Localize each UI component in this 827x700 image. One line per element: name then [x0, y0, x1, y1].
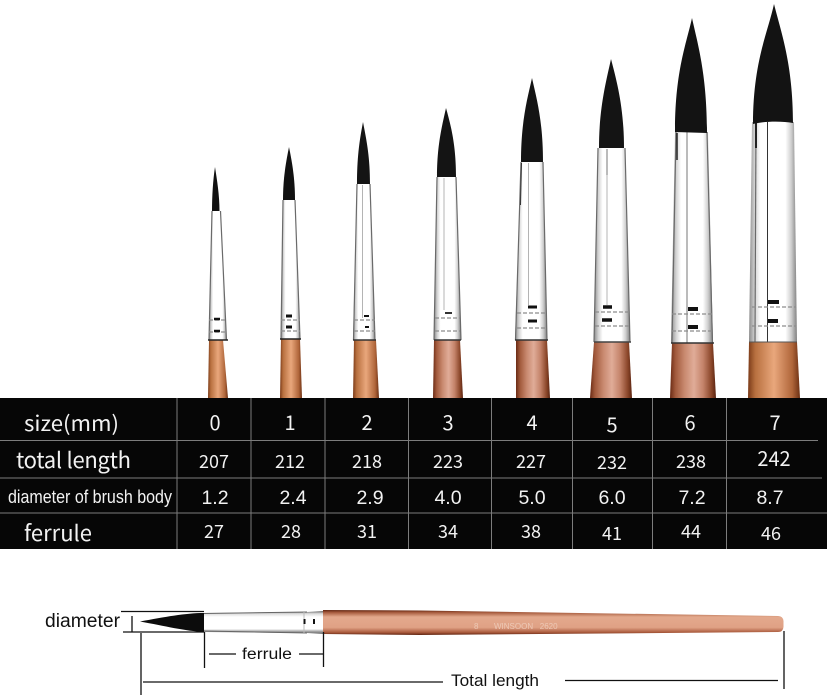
row: ferrule: ferrule [24, 516, 92, 548]
diameter marker [45, 611, 204, 632]
row: diameter of brush body: 8.7 [756, 487, 784, 509]
ferrule marker: ferrule [242, 646, 292, 663]
row: total length: 212 [275, 448, 305, 474]
row: total length: 207 [199, 448, 229, 474]
brush ferrule [204, 611, 323, 634]
total length marker [141, 631, 784, 695]
handle imprint: 8 WINSOON 2620 [474, 622, 558, 631]
row: diameter of brush body: diameter of brush body [8, 487, 172, 507]
total length marker: Total length [451, 672, 539, 690]
row: ferrule: 38 [521, 518, 541, 544]
row: ferrule [24, 516, 781, 548]
row: diameter of brush body: 7.2 [678, 487, 706, 509]
row: total length: 242 [757, 443, 791, 472]
row: ferrule: 46 [761, 520, 781, 546]
brush size 2 [353, 122, 379, 398]
row: size: 4 [526, 407, 538, 436]
row: diameter of brush body: 5.0 [518, 487, 546, 509]
brush size 6 [670, 18, 716, 398]
row: size: 2 [361, 407, 373, 436]
row: diameter of brush body: 1.2 [201, 487, 229, 509]
row: diameter of brush body: 6.0 [598, 487, 626, 509]
row: total length [16, 443, 791, 475]
brush size 4 [515, 78, 550, 398]
row: ferrule: 34 [438, 518, 458, 544]
row: total length: total length [16, 443, 131, 475]
row: ferrule: 27 [204, 518, 224, 544]
row: size: size(mm) [24, 408, 119, 438]
brush size 0 [208, 167, 228, 398]
row: ferrule: 31 [357, 518, 377, 544]
row: diameter of brush body: 4.0 [434, 487, 462, 509]
row: diameter of brush body [8, 487, 784, 509]
row: size: 0 [209, 407, 221, 436]
row: size: 5 [606, 409, 618, 438]
row: size: 7 [769, 407, 781, 436]
row: ferrule: 44 [681, 518, 701, 544]
row: size: 3 [442, 407, 454, 436]
row: size: 6 [684, 407, 696, 436]
row: size [24, 407, 781, 438]
size table [0, 398, 827, 549]
row: total length: 232 [597, 449, 627, 475]
brush size 3 [433, 108, 463, 398]
row: total length: 238 [676, 448, 706, 474]
row: total length: 218 [352, 448, 382, 474]
brush size 5 [590, 59, 632, 398]
row: diameter of brush body: 2.9 [356, 487, 384, 509]
brush size 7 [748, 4, 800, 398]
row: diameter of brush body: 2.4 [279, 487, 307, 509]
row: ferrule: 28 [281, 518, 301, 544]
row: total length: 223 [433, 448, 463, 474]
brush size 1 [280, 147, 302, 398]
diameter marker: diameter [45, 611, 121, 632]
row: total length: 227 [516, 448, 546, 474]
ferrule marker [204, 632, 324, 668]
brush handle [323, 610, 784, 635]
row: size: 1 [284, 407, 296, 436]
labelled brush diagram [45, 610, 784, 695]
row: ferrule: 41 [602, 520, 622, 546]
brush bristles [140, 613, 204, 632]
